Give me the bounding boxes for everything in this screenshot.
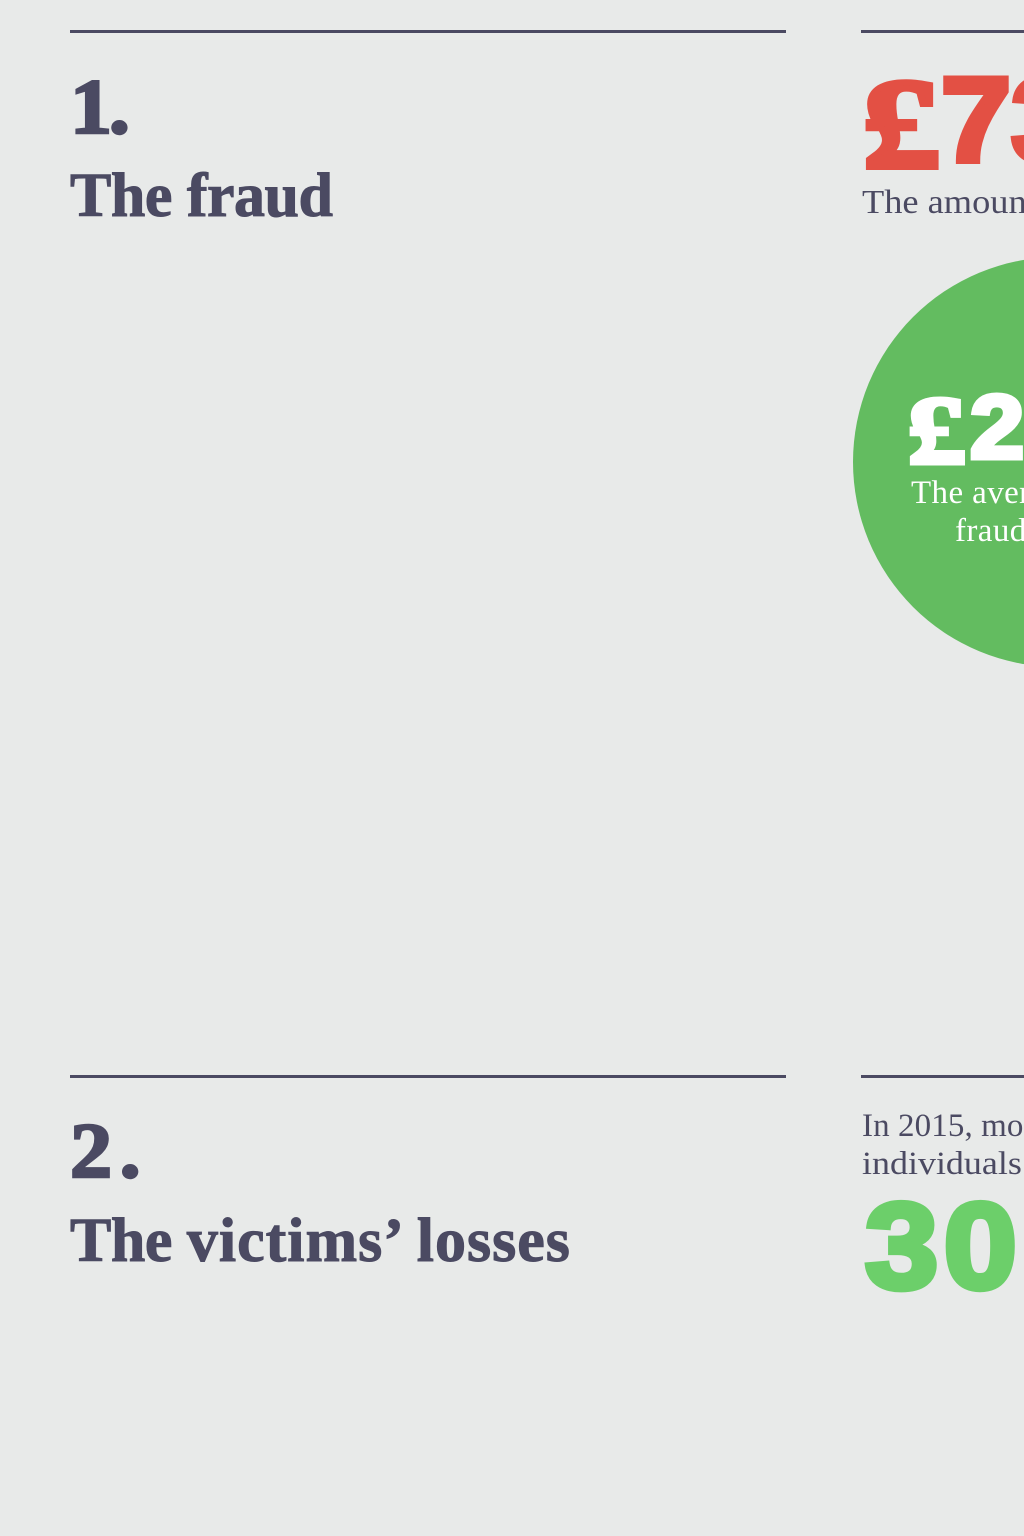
text: in 2015 [862,1108,1024,1182]
text: in 2015: In 2015, mo [862,1108,1024,1144]
circle figure: 2 [970,378,1024,478]
section number 1: 1. [70,63,127,150]
big number: amount [863,53,1024,195]
section rule 2 left [70,1075,786,1078]
section rule 1 left [70,30,786,33]
section rule 2 right [861,1075,1024,1078]
section rule 1 right [861,30,1024,33]
text: in 2015: individuals [862,1146,1022,1182]
big number: 30: 30 [865,1178,1022,1314]
heading: the fraud: The fraud [70,162,332,230]
heading: the victims' losses: The victims’ losses [70,1207,571,1275]
green circle callout [853,257,1024,667]
circle figure: £ [908,377,966,484]
circle figure [908,377,1024,484]
big number: amount: £ [863,53,940,195]
section number 2: 2. [70,1107,148,1194]
